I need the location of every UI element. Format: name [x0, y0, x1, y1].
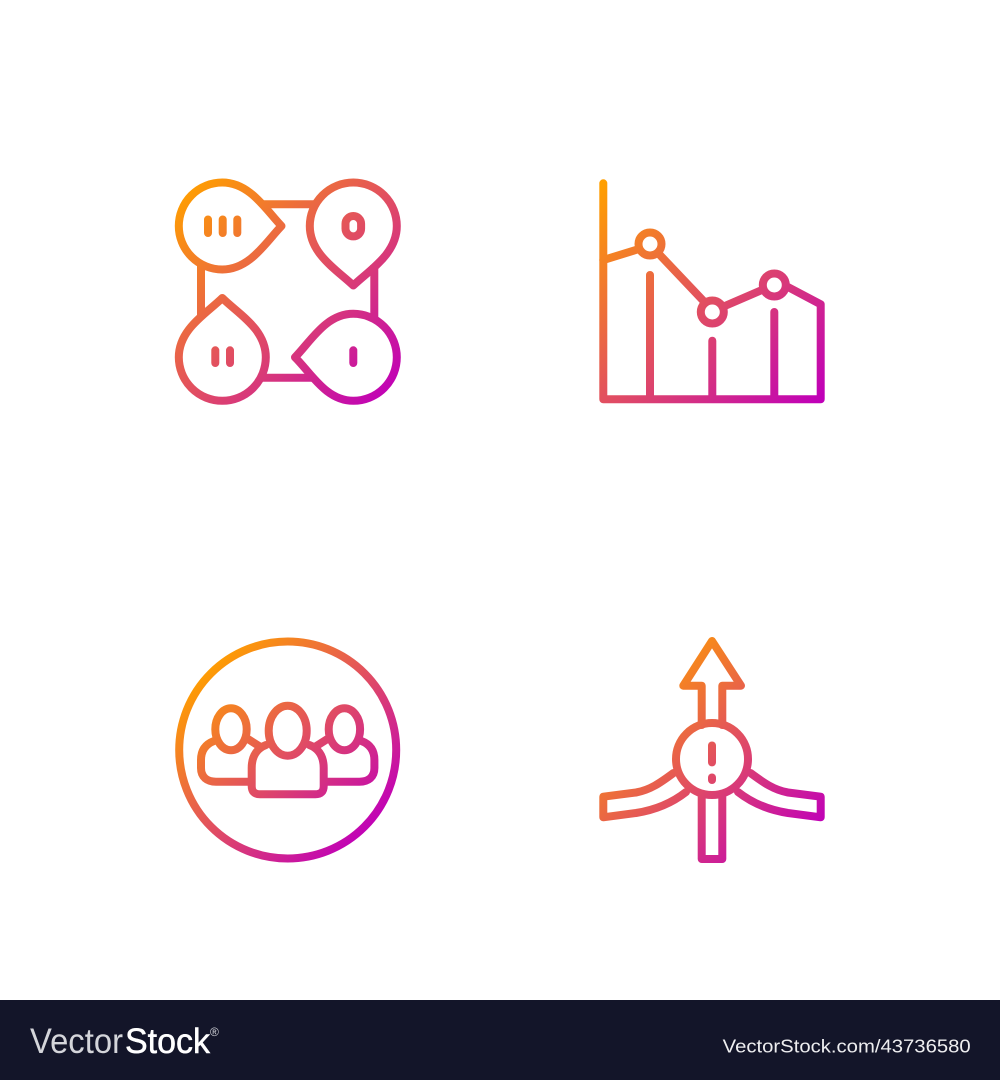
pin: top left, pointing right — [179, 182, 282, 270]
arrow pointing up — [683, 641, 741, 725]
connector: top — [264, 200, 314, 208]
footer logo: VectorStock: Vector — [30, 1022, 123, 1061]
footer logo: VectorStock — [30, 1022, 219, 1061]
data point: second — [701, 300, 724, 324]
mark: one bar — [349, 350, 357, 363]
marks: two bars — [215, 350, 230, 363]
chart axes and right edge — [603, 183, 821, 399]
footer bar — [0, 1000, 1000, 1080]
icon: group of three people in a circle — [179, 642, 396, 858]
pin: top right, pointing down — [310, 182, 397, 286]
connector: left — [197, 265, 205, 318]
icon: crossroads with warning mark and up arrow — [603, 641, 821, 859]
data point: first — [638, 232, 662, 256]
footer logo: VectorStock: Stock — [125, 1022, 210, 1061]
pin: bottom left, pointing up — [179, 298, 266, 401]
icon: four numbered map pins in a cycle — [179, 182, 397, 401]
road: left — [603, 773, 686, 817]
person: left — [201, 708, 259, 782]
outer circle — [179, 642, 396, 858]
footer image id: VectorStock.com/43736580 — [723, 1036, 971, 1056]
connector: right — [370, 265, 378, 318]
chart bars — [650, 275, 774, 399]
footer logo: VectorStock: ® — [210, 1025, 219, 1039]
icon: declining line and bar chart — [603, 183, 821, 399]
road: bottom — [702, 797, 722, 859]
exclamation mark — [708, 746, 716, 780]
data point: third — [763, 274, 786, 296]
person: centre — [252, 706, 324, 794]
mark: zero — [346, 216, 361, 236]
pin: bottom right, pointing left — [295, 314, 397, 401]
connector: bottom — [262, 374, 312, 382]
trend line segments — [603, 249, 763, 307]
person: right — [316, 708, 374, 782]
road: right — [738, 773, 821, 817]
marks: three bars — [208, 220, 237, 233]
warning circle — [676, 723, 748, 795]
